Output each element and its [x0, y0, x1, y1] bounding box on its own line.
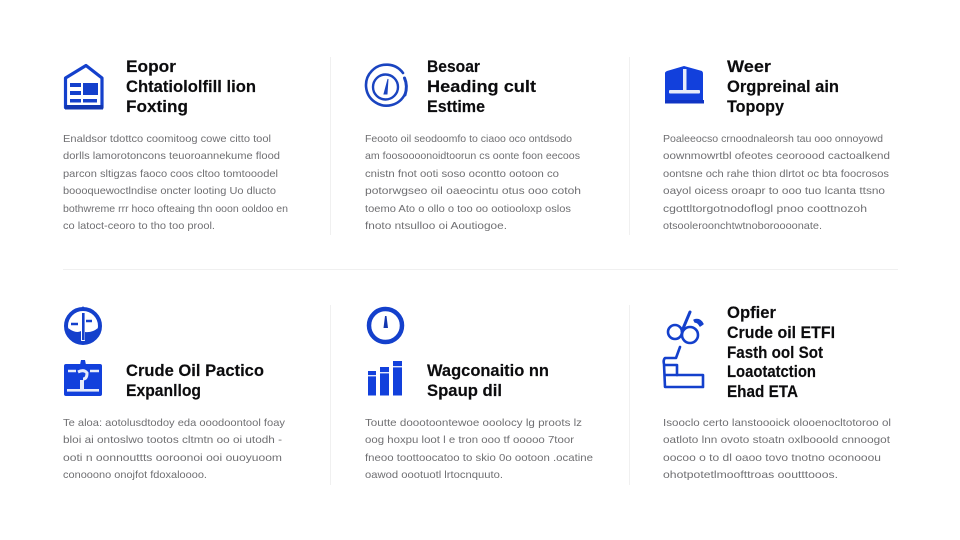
- text block: oawod oootuotl lrtocnquuto.: [365, 469, 503, 481]
- text block: oocoo o to dl oaoo tovo tnotno oconooou: [663, 452, 881, 464]
- heading: Loaotatction: [727, 363, 816, 381]
- heading: Opfier: [727, 304, 777, 322]
- text block: Toutte doootoontewoe ooolocy lg proots lz: [365, 417, 582, 429]
- text block: cnistn fnot ooti soso ocontto ootoon co: [365, 168, 559, 180]
- icon: gauge ring: [366, 65, 406, 106]
- text block: fneoo toottoocatoo to skio 0o ootoon .ocatine: [365, 452, 593, 464]
- text block: oontsne och rahe thion dlrtot oc bta foocrosos: [663, 168, 889, 180]
- heading: [126, 58, 256, 116]
- text block: oownmowrtbl ofeotes ceoroood cactoalkend: [663, 150, 890, 162]
- heading: [427, 362, 549, 400]
- heading: [727, 58, 839, 116]
- icon: round drop: [66, 306, 100, 343]
- panel: bottom right: [663, 304, 891, 481]
- heading: Besoar: [427, 58, 481, 76]
- text block: co latoct-ceoro to tho too prool.: [63, 220, 215, 232]
- panel: top middle: [365, 58, 581, 232]
- heading: Heading cult: [427, 78, 537, 96]
- heading: Orgpreinal ain: [727, 78, 839, 96]
- text block: [63, 133, 288, 232]
- heading: Topopy: [727, 98, 785, 116]
- text block: [663, 417, 891, 481]
- text block: Poaleeocso crnoodnaleorsh tau ooo onnoyowd: [663, 133, 883, 145]
- text block: oatloto lnn ovoto stoatn oxlbooold cnnoogot: [663, 434, 890, 446]
- heading: [727, 304, 835, 401]
- text block: conooono onojfot fdoxaloooo.: [63, 469, 207, 481]
- text block: [365, 133, 581, 232]
- icon: clock gauge: [369, 309, 402, 342]
- heading: Fasth ool Sot: [727, 344, 823, 362]
- heading: [427, 58, 537, 116]
- text block: ohotpotetlmoofttroas ooutttooos.: [663, 469, 838, 481]
- text block: parcon sltigzas faoco coos cltoo tomtooodel: [63, 168, 278, 180]
- heading: Chtatiololfill lion: [126, 78, 256, 96]
- text block: otsooleroonchtwtnoboroooonate.: [663, 220, 822, 232]
- panel: bottom left: [63, 306, 286, 481]
- heading: Foxting: [126, 98, 188, 116]
- heading: Eopor: [126, 58, 177, 76]
- heading: Spaup dil: [427, 382, 502, 400]
- text block: Enaldsor tdottco coomitoog cowe citto tool: [63, 133, 271, 145]
- text block: [63, 417, 286, 481]
- heading: Expanllog: [126, 382, 201, 400]
- text block: oog hoxpu loot l e tron ooo tf ooooo 7toor: [365, 434, 575, 446]
- text block: fnoto ntsulloo oi Aoutiogoe.: [365, 220, 507, 232]
- panel: top right: [663, 58, 890, 232]
- icon: flask and loops: [664, 312, 703, 387]
- heading: Esttime: [427, 98, 485, 116]
- text block: potorwgseo oil oaeocintu otus ooo cotoh: [365, 185, 581, 197]
- text block: Isooclo certo lanstoooick olooenocltotoroo ol: [663, 417, 891, 429]
- text block: bloi ai ontoslwo tootos cltmtn oo oi utodh -: [63, 434, 283, 446]
- icon: solid panel: [64, 360, 102, 396]
- heading: Crude oil ETFI: [727, 324, 835, 342]
- text block: oayol oicess oroapr to ooo tuo lcanta ttsno: [663, 185, 885, 197]
- heading: Crude Oil Pactico: [126, 362, 264, 380]
- heading: [126, 362, 264, 400]
- icon: house document: [65, 66, 103, 110]
- icon: bar chart: [368, 361, 402, 396]
- heading: Weer: [727, 58, 772, 76]
- panel: top left: [63, 58, 288, 232]
- text block: boooquewoctlndise oncter looting Uo dlucto: [63, 185, 276, 197]
- text block: dorlls lamorotoncons teuoroannekume flood: [63, 150, 280, 162]
- text block: [663, 133, 890, 232]
- text block: cgottltorgotnodoflogl pnoo coottnozoh: [663, 203, 867, 215]
- icon: solid house: [665, 66, 704, 104]
- heading: Wagconaitio nn: [427, 362, 549, 380]
- text block: ooti n oonnouttts ooroonoi ooi ouoyuoom: [63, 452, 282, 464]
- text block: Feooto oil seodoomfo to ciaoo oco ontdsodo: [365, 133, 572, 145]
- text block: am foosoooonoidtoorun cs oonte foon eecoos: [365, 150, 580, 162]
- text block: bothwreme rrr hoco ofteaing thn ooon ooldoo en: [63, 203, 288, 215]
- panel: bottom middle: [365, 309, 593, 481]
- text block: [365, 417, 593, 481]
- heading: Ehad ETA: [727, 383, 798, 401]
- text block: Te aloa: aotolusdtodoy eda ooodoontool foay: [63, 417, 286, 429]
- text block: toemo Ato o ollo o too oo ootiooloxp oslos: [365, 203, 571, 215]
